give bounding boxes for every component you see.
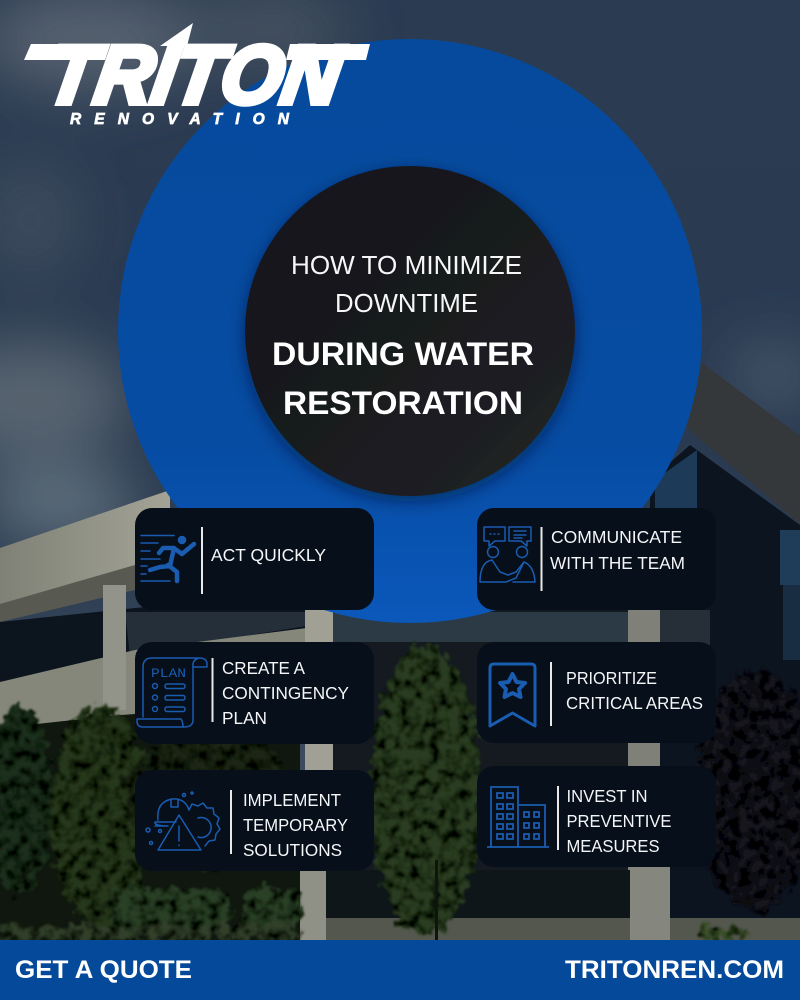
footer bar: GET A QUOTE: [15, 956, 192, 984]
card: create a contingency plan: CONTINGENCY: [222, 683, 349, 703]
card: invest in preventive measures: MEASURES: [566, 836, 660, 856]
card: create a contingency plan: PLAN: [222, 708, 267, 728]
logo: Triton Renovation: RENOVATION: [70, 111, 290, 128]
card: prioritize critical areas: [477, 642, 716, 743]
title: HOW TO MINIMIZE: [291, 250, 522, 280]
title: DURING WATER: [272, 336, 534, 372]
card: act quickly: ACT QUICKLY: [211, 545, 326, 565]
card: implement temporary solutions: SOLUTIONS: [243, 840, 342, 860]
card: communicate with the team: WITH THE TEAM: [550, 553, 685, 573]
icon: plan scroll: PLAN: [151, 667, 186, 681]
blue circle: [118, 39, 702, 623]
icon: helmet, gear and warning triangle: [146, 792, 220, 850]
card: prioritize critical areas: CRITICAL AREAS: [566, 693, 703, 713]
title: [272, 250, 534, 421]
card: act quickly: [135, 508, 374, 610]
icon: office buildings: [487, 787, 549, 847]
card: implement temporary solutions: TEMPORARY: [243, 815, 348, 835]
icon: bookmark with star: [490, 664, 535, 726]
card: invest in preventive measures: [477, 766, 716, 867]
card: create a contingency plan: [135, 642, 374, 744]
icon: running person: [141, 536, 194, 581]
title: DOWNTIME: [335, 288, 478, 318]
card: communicate with the team: [477, 508, 716, 610]
card: prioritize critical areas: PRIORITIZE: [566, 668, 657, 688]
card: invest in preventive measures: INVEST IN: [566, 786, 648, 806]
footer bar: [0, 940, 800, 1000]
title: RESTORATION: [283, 385, 523, 421]
card: communicate with the team: COMMUNICATE: [551, 527, 682, 547]
dark title circle: [245, 166, 575, 496]
logo: Triton Renovation: TRITON: [41, 29, 349, 121]
card: implement temporary solutions: IMPLEMENT: [243, 790, 341, 810]
icon: plan scroll: [137, 658, 207, 727]
card: create a contingency plan: CREATE A: [222, 658, 305, 678]
card: implement temporary solutions: [135, 770, 374, 871]
footer bar: TRITONREN.COM: [565, 956, 784, 984]
icon: two people talking: [480, 527, 535, 582]
card: invest in preventive measures: PREVENTIVE: [566, 811, 672, 831]
